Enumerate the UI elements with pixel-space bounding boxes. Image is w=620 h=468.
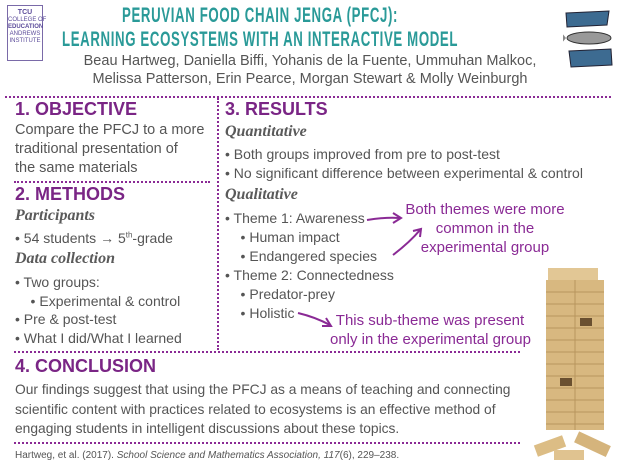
authors: Beau Hartweg, Daniella Biffi, Yohanis de la Fuente, Ummuhan Malkoc, <box>84 53 536 69</box>
panel: results: • Holistic <box>241 305 294 321</box>
panel: conclusion: Our findings suggest that using the PFCJ as a means of teaching and connecting <box>15 382 510 397</box>
callout: both themes <box>405 201 565 256</box>
title: PERUVIAN FOOD CHAIN JENGA (PFCJ): <box>122 4 398 27</box>
panel: conclusion: engaging students in intelligent discussions about these topics. <box>15 421 399 436</box>
logo: TCU college of education: EDUCATION <box>8 24 43 30</box>
title: LEARNING ECOSYSTEMS WITH AN INTERACTIVE MODEL <box>62 28 458 51</box>
panel: results: • Human impact <box>241 229 340 245</box>
citation: Hartweg, et al. (2017). School Science and Mathematics Association, 117(6), 229–238. <box>15 450 399 461</box>
title <box>62 4 458 51</box>
logo: TCU college of education: INSTITUTE <box>10 38 40 44</box>
panel: conclusion <box>15 356 510 436</box>
panel: methods <box>14 184 182 346</box>
panel: methods: Data collection <box>15 250 115 267</box>
panel: methods: • Two groups: <box>15 274 100 290</box>
panel: results: Qualitative <box>225 186 298 203</box>
arrows <box>298 212 422 327</box>
panel: results: 3. RESULTS <box>225 99 328 119</box>
panel: results <box>225 99 583 348</box>
logo: TCU college of education: COLLEGE OF <box>8 17 46 23</box>
panel: methods: Participants <box>15 207 95 224</box>
panel: conclusion: 4. CONCLUSION <box>15 356 156 376</box>
panel: results: • Both groups improved from pre to post-test <box>225 146 500 162</box>
panel: methods: • 54 students → 5th-grade <box>15 230 173 246</box>
panel: methods: • Experimental & control <box>31 292 180 308</box>
panel: objective: the same materials <box>15 160 138 176</box>
panel: methods: 2. METHODS <box>15 184 125 204</box>
panel: methods: • Pre & post-test <box>15 311 116 327</box>
authors <box>84 53 536 87</box>
panel: objective: traditional presentation of <box>15 141 178 157</box>
callout: sub-theme: only in the experimental group <box>330 331 531 348</box>
panel: results: • Theme 2: Connectedness <box>225 267 394 283</box>
callout: both themes: common in the <box>436 220 534 237</box>
panel: objective: Compare the PFCJ to a more <box>15 122 204 138</box>
logo: TCU college of education: TCU <box>18 9 32 16</box>
callout: both themes: experimental group <box>421 239 549 256</box>
panel: conclusion: scientific content with practices related to ecosystems is an effective method of <box>15 402 496 416</box>
callout: sub-theme: This sub-theme was present <box>336 312 524 329</box>
panel: results: Quantitative <box>225 123 307 140</box>
callout: both themes: Both themes were more <box>405 201 565 218</box>
callout: sub-theme <box>330 312 531 348</box>
logo: fish banner <box>563 10 612 68</box>
panel: results: • Predator-prey <box>241 286 335 302</box>
jenga tower <box>534 268 611 460</box>
panel: methods: • What I did/What I learned <box>15 330 182 346</box>
authors: Melissa Patterson, Erin Pearce, Morgan Stewart & Molly Weinburgh <box>93 71 527 87</box>
panel: objective <box>15 99 204 176</box>
panel: results: • Endangered species <box>241 248 377 264</box>
panel: results: • Theme 1: Awareness <box>225 210 365 226</box>
logo: TCU college of education <box>7 5 43 61</box>
panel: objective: 1. OBJECTIVE <box>15 99 137 119</box>
panel: results: • No significant difference between experimental & control <box>225 165 583 181</box>
logo: TCU college of education: ANDREWS <box>10 31 40 37</box>
